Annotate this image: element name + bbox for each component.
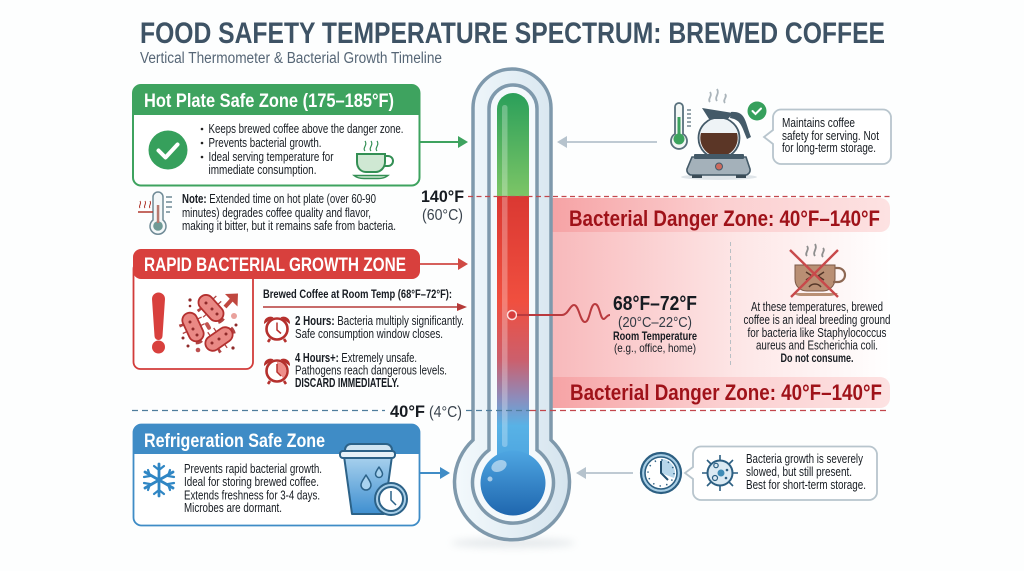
icon: note thermometer xyxy=(138,192,172,234)
icon: bacteria with growth arrow xyxy=(180,292,238,354)
panel: rapid bacterial growth zone xyxy=(133,249,467,390)
thermometer xyxy=(451,69,575,548)
2 hours text: Safe consumption window closes. xyxy=(295,326,443,341)
subtitle: Vertical Thermometer & Bacterial Growth Timeline xyxy=(140,50,442,67)
red to blue mercury xyxy=(497,196,529,458)
body text: Ideal for storing brewed coffee. xyxy=(184,474,319,489)
panel: refrigeration safe zone xyxy=(133,424,420,526)
callout: coffee safety xyxy=(764,110,891,164)
body text: Prevents rapid bacterial growth. xyxy=(184,461,322,476)
bullet list xyxy=(201,121,404,177)
40F label: 40°F xyxy=(390,402,425,421)
icon: cold cup with clock xyxy=(340,444,407,515)
4 hours text: 4 Hours+: Extremely unsafe. xyxy=(295,350,417,365)
room temperature readout: (e.g., office, home) xyxy=(614,341,696,355)
mercury bulb xyxy=(480,450,546,516)
arrow: coffee pot to thermometer xyxy=(557,136,657,148)
callout: refrigerated bacteria: Best for short-term storage. xyxy=(746,477,866,492)
4 hours text: Pathogens reach dangerous levels. xyxy=(295,362,447,378)
icon: check xyxy=(148,130,188,170)
icon: green check xyxy=(748,102,766,120)
danger zone explanation: for bacteria like Staphylococcus xyxy=(748,325,887,340)
icon: small thermometer xyxy=(671,103,691,149)
top danger band xyxy=(552,198,890,232)
note text: Note: Extended time on hot plate (over 60-90 xyxy=(182,191,376,206)
note text: making it bitter, but it remains safe from bacteria. xyxy=(182,218,396,233)
icon: alarm clock 2 hours xyxy=(264,317,290,342)
icon: crossed-out coffee cup xyxy=(790,244,845,297)
subheading with arrow xyxy=(263,287,467,311)
green mercury xyxy=(497,93,529,196)
callout: coffee safety: Maintains coffee xyxy=(782,115,855,130)
40F threshold line xyxy=(132,410,890,412)
callout: coffee safety: safety for serving. Not xyxy=(782,128,879,143)
40F label: (4°C) xyxy=(429,404,462,421)
heading: Hot Plate Safe Zone (175–185°F) xyxy=(144,91,394,112)
icon: slowed microbe xyxy=(702,455,738,491)
body text: Microbes are dormant. xyxy=(184,500,282,515)
danger zone explanation xyxy=(744,299,890,365)
40F label xyxy=(390,402,462,421)
heading: Refrigeration Safe Zone xyxy=(144,431,325,452)
body text: Extends freshness for 3-4 days. xyxy=(184,488,320,502)
title: FOOD SAFETY TEMPERATURE SPECTRUM: BREWED COFFEE xyxy=(140,17,885,50)
icon: alarm clock 4 hours xyxy=(264,359,290,384)
bullet list: Keeps brewed coffee above the danger zone. xyxy=(208,121,404,136)
panel: hot plate safe zone xyxy=(133,85,420,186)
icon: green coffee cup xyxy=(354,141,393,178)
bullet list: Ideal serving temperature for xyxy=(208,149,334,164)
140F threshold line xyxy=(468,196,890,198)
danger zone explanation: At these temperatures, brewed xyxy=(751,299,883,314)
140F label: (60°C) xyxy=(422,207,463,224)
room temperature readout: (20°C–22°C) xyxy=(618,314,692,331)
arrow: clock to thermometer xyxy=(576,467,633,479)
top danger band: Bacterial Danger Zone: 40°F–140°F xyxy=(569,206,880,231)
arrow: hot plate to thermometer xyxy=(420,136,468,148)
arrow: rapid growth to thermometer xyxy=(420,258,468,270)
icon: snowflake xyxy=(144,464,174,496)
bottom danger band: Bacterial Danger Zone: 40°F–140°F xyxy=(570,380,882,405)
2 hours text xyxy=(295,313,464,341)
room temperature pointer xyxy=(508,304,610,322)
room temperature readout: Room Temperature xyxy=(613,329,697,343)
bullet list: immediate consumption. xyxy=(208,162,316,177)
arrow: refrigeration to thermometer xyxy=(420,467,450,479)
140F label xyxy=(421,187,464,224)
callout: refrigerated bacteria xyxy=(685,446,877,500)
subheading with arrow: Brewed Coffee at Room Temp (68°F–72°F): xyxy=(263,287,452,301)
2 hours text: 2 Hours: Bacteria multiply significantly. xyxy=(295,313,464,328)
icon: coffee pot on hot plate xyxy=(671,89,766,180)
room temperature readout: 68°F–72°F xyxy=(613,292,697,315)
4 hours text: DISCARD IMMEDIATELY. xyxy=(295,375,399,390)
icon: wall clock xyxy=(641,453,681,493)
note text: minutes) degrades coffee quality and flavor, xyxy=(182,205,371,220)
room temperature readout xyxy=(613,292,697,355)
panel: bacterial danger zone background xyxy=(552,198,890,408)
note block xyxy=(138,191,396,234)
icon: exclamation mark xyxy=(152,292,165,354)
callout: refrigerated bacteria: Bacteria growth is severely xyxy=(746,451,863,466)
body text xyxy=(184,461,322,515)
140F label: 140°F xyxy=(421,187,464,206)
danger zone explanation: aureus and Escherichia coli. xyxy=(756,338,878,352)
bullet list: Prevents bacterial growth. xyxy=(208,135,322,150)
danger zone explanation: coffee is an ideal breeding ground xyxy=(744,312,890,327)
4 hours text xyxy=(295,350,447,390)
danger zone explanation: Do not consume. xyxy=(780,351,854,365)
callout: coffee safety: for long-term storage. xyxy=(782,140,876,155)
note text xyxy=(182,191,396,233)
callout: refrigerated bacteria: slowed, but still present. xyxy=(746,464,852,479)
heading: RAPID BACTERIAL GROWTH ZONE xyxy=(144,254,406,276)
bottom danger band xyxy=(552,377,890,408)
